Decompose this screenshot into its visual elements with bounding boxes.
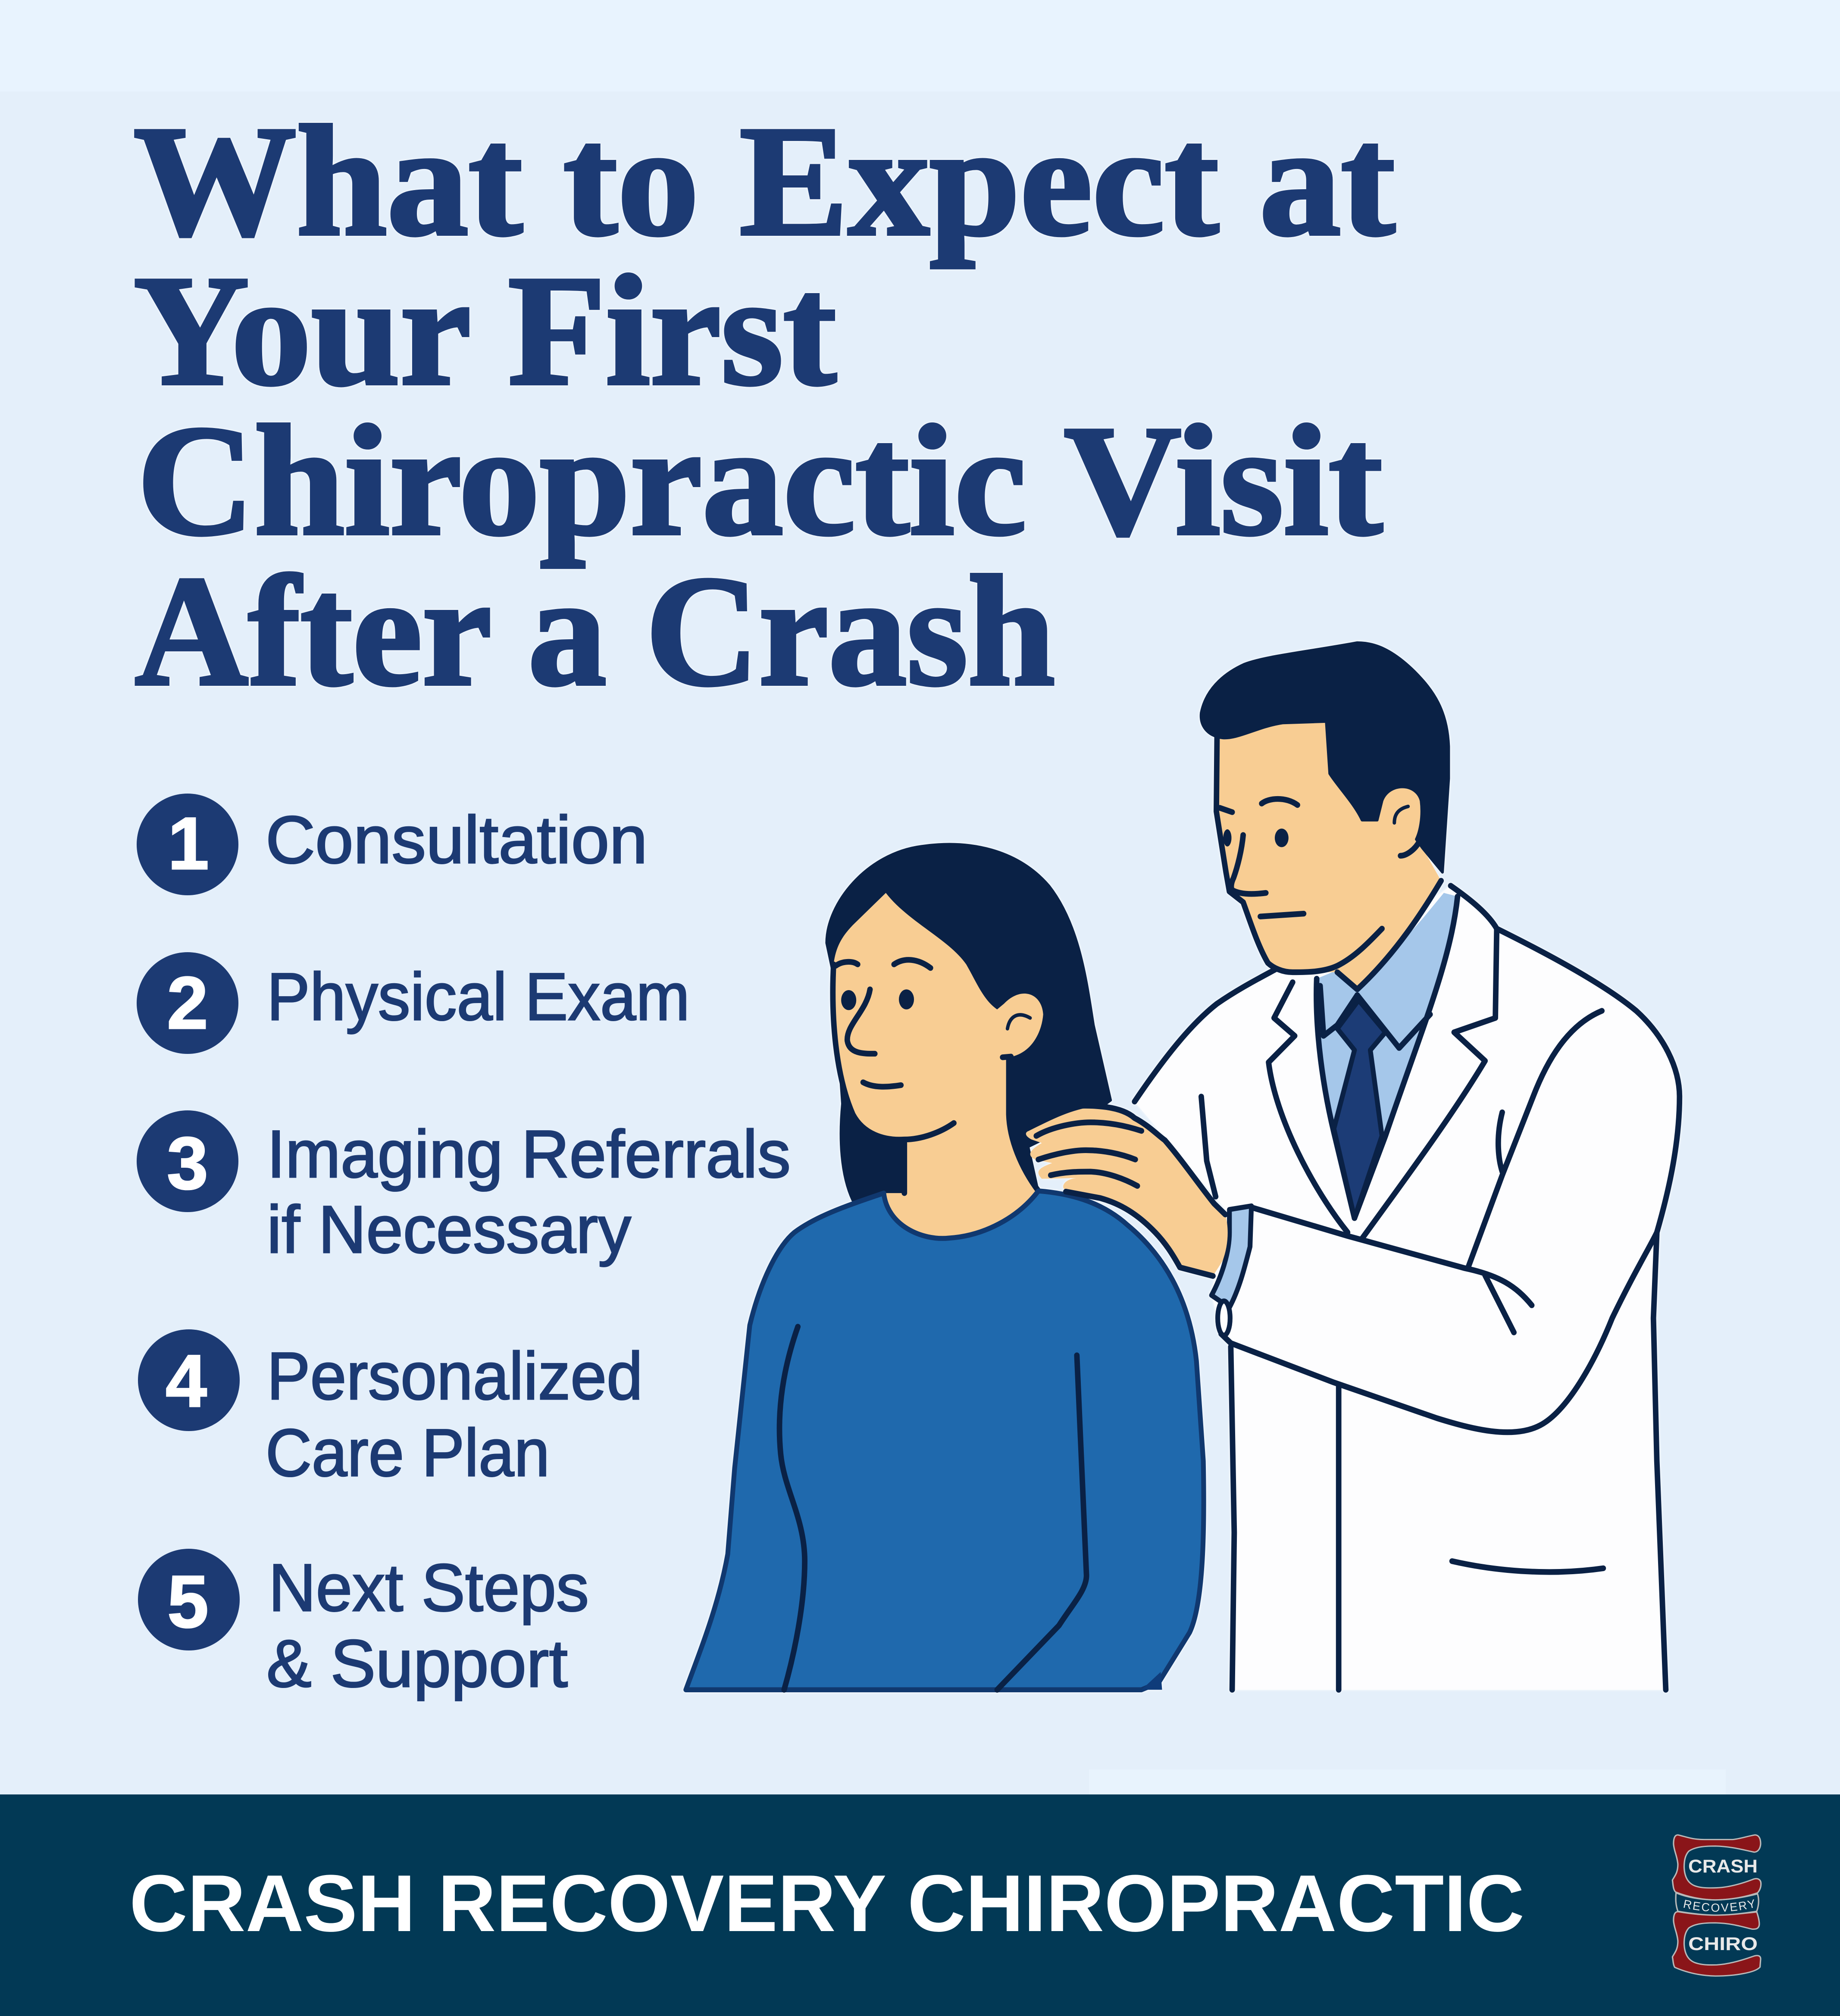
step 5: next steps and support: 5 bbox=[167, 1560, 209, 1643]
face and neck bbox=[1216, 722, 1441, 989]
face and neck bbox=[833, 893, 1043, 1238]
white coat bbox=[1135, 886, 1680, 1690]
step 3: imaging referrals: Imaging Referrals bbox=[267, 1117, 791, 1192]
blue sweater bbox=[686, 1191, 1204, 1690]
hand on patient's shoulder bbox=[1026, 1106, 1228, 1276]
step 5: next steps and support: Next Steps bbox=[269, 1550, 589, 1625]
step 3: imaging referrals: 3 bbox=[167, 1122, 208, 1205]
step 4: personalized care plan: Personalized bbox=[267, 1339, 643, 1414]
footer bar bbox=[0, 1794, 1840, 2016]
step 3: imaging referrals bbox=[137, 1110, 791, 1267]
panel: numbered steps bbox=[137, 794, 791, 1701]
step 1: consultation: Consultation bbox=[266, 803, 648, 878]
step 2: physical exam bbox=[137, 952, 690, 1054]
step 2: physical exam: 2 bbox=[167, 962, 208, 1044]
title: After a Crash bbox=[135, 544, 1055, 719]
chiropractor bbox=[1135, 643, 1680, 1690]
lapels bbox=[1269, 928, 1497, 1240]
illustration: chiropractor examining patient bbox=[686, 643, 1680, 1690]
shirt cuff bbox=[1211, 1206, 1252, 1335]
step 2: physical exam: Physical Exam bbox=[267, 960, 690, 1035]
step 3: imaging referrals: if Necessary bbox=[267, 1192, 631, 1267]
long hair bbox=[827, 844, 1111, 1200]
step 4: personalized care plan: Care Plan bbox=[266, 1416, 550, 1491]
tie bbox=[1334, 1000, 1386, 1218]
title bbox=[134, 94, 1397, 719]
patient bbox=[686, 844, 1204, 1690]
logo word: crash: CRASH bbox=[1688, 1856, 1758, 1877]
step 5: next steps and support: & Support bbox=[266, 1626, 568, 1701]
logo word: recovery: RECOVERY bbox=[1682, 1897, 1758, 1914]
title: Your First bbox=[134, 244, 838, 418]
logo word: chiro: CHIRO bbox=[1688, 1934, 1758, 1954]
title: What to Expect at bbox=[134, 94, 1397, 269]
step 1: consultation: 1 bbox=[168, 802, 209, 885]
step 1: consultation bbox=[137, 794, 648, 895]
step 5: next steps and support bbox=[138, 1549, 589, 1701]
step 4: personalized care plan: 4 bbox=[166, 1340, 207, 1422]
footer brand name: CRASH RECOVERY CHIROPRACTIC bbox=[129, 1858, 1524, 1948]
shirt and collar bbox=[1316, 893, 1458, 1218]
title: Chiropractic Visit bbox=[137, 394, 1384, 568]
hair bbox=[1201, 643, 1449, 872]
step 4: personalized care plan bbox=[138, 1329, 643, 1491]
logo: spine vertebrae bbox=[1672, 1835, 1761, 1976]
